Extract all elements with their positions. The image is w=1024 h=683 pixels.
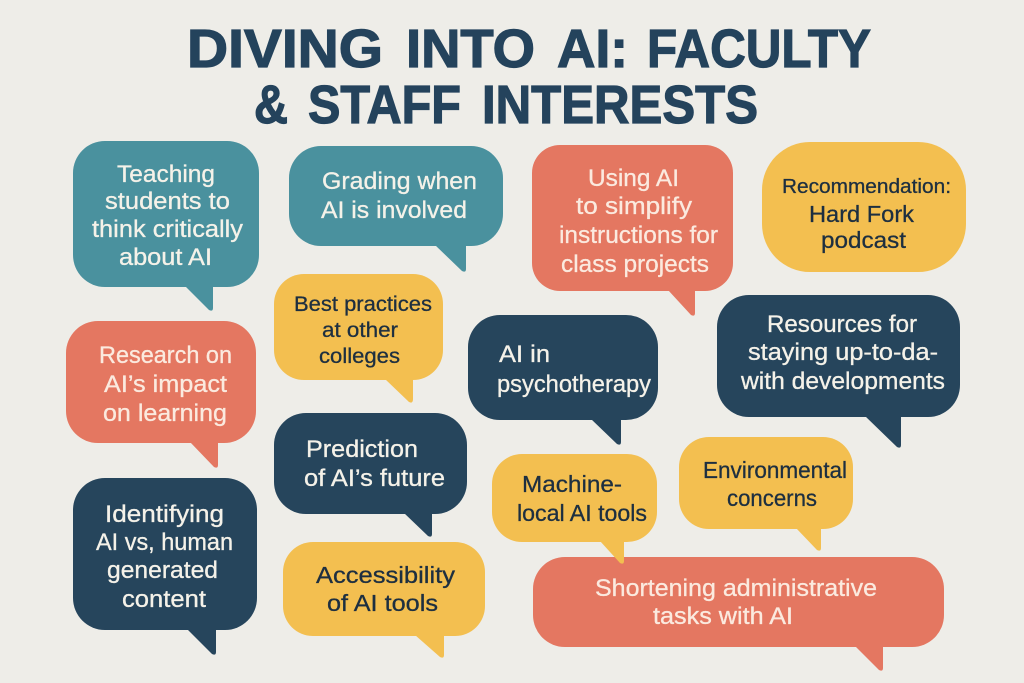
- bubble: teaching students: Teaching: [117, 161, 215, 188]
- bubble: accessibility: [283, 542, 485, 658]
- bubble: simplify instructions: Using AI: [588, 165, 679, 192]
- bubble: best practices: Best practices: [294, 292, 432, 316]
- bubble: teaching students: students to: [105, 188, 230, 215]
- bubble: recommendation: podcast: [821, 227, 907, 253]
- bubble: simplify instructions: [532, 145, 733, 316]
- bubble: research impact: on learning: [103, 400, 227, 427]
- bubble: identifying: [73, 478, 257, 655]
- bubble: shortening administrative tasks: tasks with AI: [653, 603, 793, 630]
- bubble: best practices: at other: [322, 318, 398, 342]
- title: &: [254, 75, 288, 135]
- bubble: teaching students: [73, 141, 259, 311]
- bubble: simplify instructions: class projects: [561, 251, 709, 278]
- title: FACULTY: [647, 19, 871, 79]
- bubble: resources: Resources for: [767, 311, 917, 338]
- bubble: teaching students: think critically: [92, 216, 243, 243]
- bubble: resources: staying up-to-da-: [748, 339, 938, 366]
- bubble: machine-local: Machine-: [522, 471, 622, 497]
- bubble: machine-local: [492, 454, 657, 564]
- bubble: prediction: Prediction: [306, 436, 418, 463]
- bubble: accessibility: of AI tools: [327, 590, 438, 616]
- bubble: prediction: [274, 413, 467, 537]
- bubble: identifying: AI vs, human: [96, 529, 233, 556]
- bubble: recommendation: [762, 142, 966, 272]
- bubble: resources: [717, 295, 960, 448]
- bubble: accessibility: Accessibility: [316, 562, 456, 588]
- bubble: shortening administrative tasks: Shortening administrative: [595, 575, 877, 602]
- bubble: identifying: Identifying: [105, 501, 224, 528]
- bubble: research impact: AI’s impact: [104, 371, 227, 398]
- bubble: environmental: Environmental: [703, 457, 847, 483]
- bubble: recommendation: Recommendation:: [782, 176, 951, 198]
- bubble: environmental: [679, 437, 853, 551]
- title: AI:: [557, 19, 628, 79]
- bubble: teaching students: about AI: [119, 244, 212, 271]
- bubble: environmental: concerns: [727, 485, 817, 511]
- bubble: psychotherapy: AI in: [499, 341, 550, 368]
- bubble: research impact: Research on: [99, 342, 232, 369]
- bubble: shortening administrative tasks: [533, 557, 944, 671]
- bubble: grading: Grading when: [322, 168, 477, 195]
- title: INTERESTS: [482, 75, 758, 135]
- title: INTO: [406, 19, 535, 79]
- bubble: best practices: colleges: [319, 344, 400, 368]
- title: [187, 19, 871, 135]
- bubble: simplify instructions: instructions for: [559, 222, 718, 249]
- bubble: grading: AI is involved: [321, 197, 467, 224]
- bubble: prediction: of AI’s future: [304, 465, 445, 492]
- bubble: research impact: [66, 321, 256, 468]
- bubble: machine-local: local AI tools: [517, 500, 647, 526]
- bubble: recommendation: Hard Fork: [809, 201, 915, 227]
- bubble: simplify instructions: to simplify: [576, 193, 692, 220]
- title: STAFF: [308, 75, 461, 135]
- title: DIVING: [187, 19, 383, 79]
- bubble: psychotherapy: [468, 315, 658, 445]
- bubble: best practices: [274, 274, 443, 403]
- bubble: psychotherapy: psychotherapy: [497, 371, 651, 398]
- bubble: identifying: generated: [107, 557, 218, 584]
- bubble: resources: with developments: [740, 368, 945, 395]
- bubble: grading: [289, 146, 503, 272]
- bubble: identifying: content: [122, 586, 206, 613]
